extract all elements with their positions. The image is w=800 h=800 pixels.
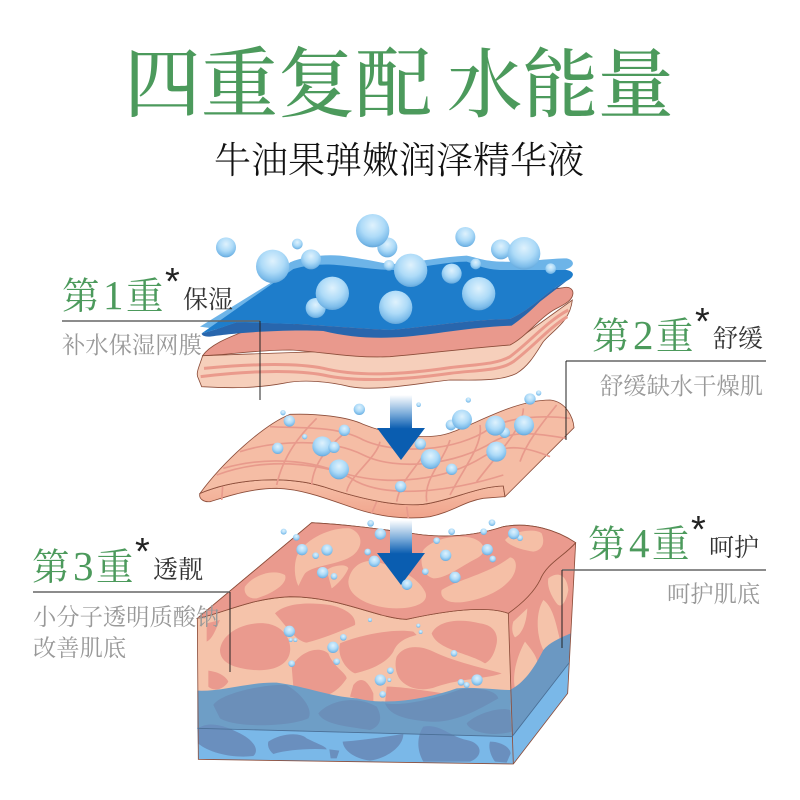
top surface blobs	[245, 528, 543, 608]
dark blue sheet	[202, 262, 573, 333]
callout 4 description: 呵护肌底	[667, 581, 760, 608]
blue band over pink	[202, 281, 567, 338]
callout 3 heading: 重	[96, 548, 134, 589]
side face	[508, 543, 576, 764]
callout 3 heading: 第	[32, 548, 70, 589]
title second part: 水能量	[447, 45, 674, 128]
illustration: bottom skin block	[197, 523, 576, 764]
pink top surface	[203, 287, 573, 357]
stripes	[201, 310, 568, 380]
water blobs	[213, 685, 512, 734]
light blue sheet	[200, 255, 573, 330]
callout 2 heading: 重	[656, 317, 694, 358]
subtitle: 牛油果弹嫩润泽精华液	[214, 140, 584, 182]
side light patches	[512, 575, 568, 688]
callout 1 heading: 1	[103, 272, 124, 318]
callout 3: 透靓	[32, 531, 230, 672]
block top surface	[197, 523, 576, 619]
callout 1 leader line	[62, 320, 260, 322]
lower striped slab	[197, 300, 572, 388]
skin grid lines	[217, 405, 570, 518]
lower band blobs	[198, 724, 511, 763]
callout 2 asterisk: *	[695, 301, 710, 343]
callout 2 leader line	[566, 360, 766, 362]
callout 1 leader drop	[259, 321, 261, 400]
side water	[510, 633, 571, 764]
callout 4 heading: 4	[629, 520, 650, 566]
callout 4 heading: 重	[652, 525, 690, 566]
arrow: top to middle	[377, 395, 425, 460]
callout 3 keyword: 透靓	[153, 556, 203, 584]
callout 4 heading: 第	[588, 525, 626, 566]
water zone	[197, 683, 512, 737]
arrow: middle to bottom	[377, 520, 425, 585]
illustration: top skin layer with water sheet	[197, 214, 573, 388]
callout 3 leader line	[33, 591, 230, 593]
layer top surface	[200, 400, 574, 505]
callout 2 keyword: 舒缓	[713, 325, 763, 353]
callout 3 heading: 3	[73, 543, 94, 589]
callout 1 keyword: 保湿	[183, 286, 233, 314]
top surface fill	[197, 523, 576, 619]
callout 2: 舒缓	[566, 301, 766, 440]
callout 1 heading: 重	[126, 277, 164, 318]
lower water band	[197, 728, 513, 764]
layer front edge	[200, 480, 505, 518]
callout 4 leader drop	[561, 570, 563, 648]
callout 1 asterisk: *	[165, 261, 180, 303]
illustration: middle skin layer	[200, 400, 574, 518]
bubbles	[216, 214, 556, 324]
callout 1 heading: 第	[62, 277, 100, 318]
callout 2 description: 舒缓缺水干燥肌	[600, 373, 763, 400]
callout 2 leader drop	[565, 361, 567, 440]
front face tissue blobs	[207, 603, 502, 707]
callout 2 heading: 第	[592, 317, 630, 358]
callout 4 keyword: 呵护	[709, 534, 759, 562]
callout 1 description: 补水保湿网膜	[62, 332, 202, 359]
title: 四重复配	[124, 42, 432, 128]
callout 4: 呵护	[562, 509, 766, 648]
side water lower	[513, 663, 569, 764]
water bubbles on bottom block	[281, 519, 523, 698]
callout 3 description line 2: 改善肌底	[33, 635, 126, 662]
callout 4 leader line	[562, 569, 766, 571]
callout 1: 保湿	[62, 261, 260, 400]
callout 3 leader drop	[229, 592, 231, 672]
callout 2 heading: 2	[633, 312, 654, 358]
water bubbles on middle layer	[272, 390, 541, 492]
callout 3 asterisk: *	[135, 531, 150, 573]
block outline	[197, 523, 576, 764]
callout 4 asterisk: *	[691, 509, 706, 551]
callout 3 description: 小分子透明质酸钠	[33, 604, 219, 631]
front face	[197, 597, 513, 764]
